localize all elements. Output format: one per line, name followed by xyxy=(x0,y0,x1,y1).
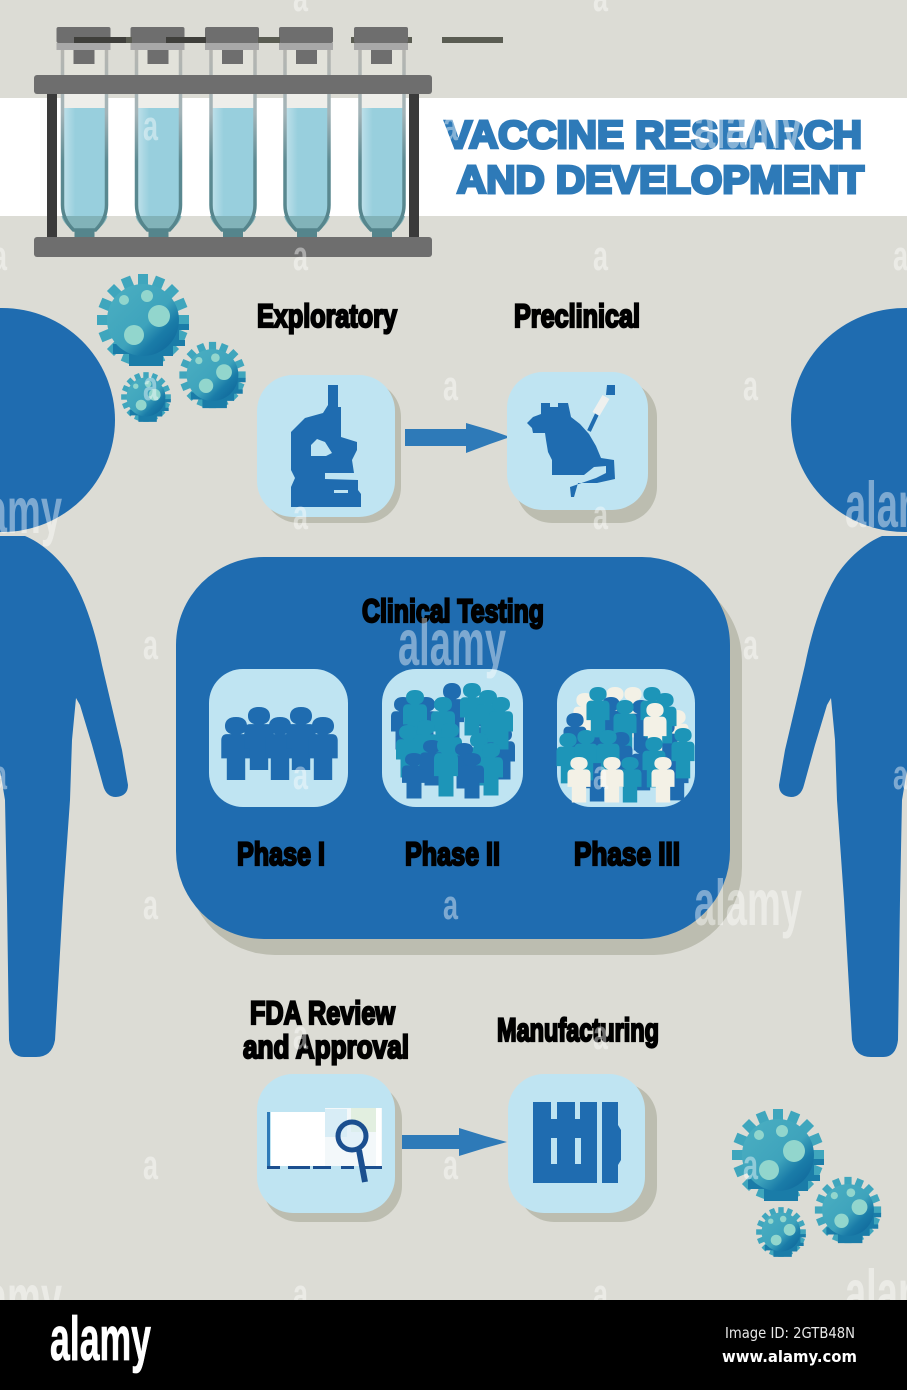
arrow: FDA review to manufacturing xyxy=(402,1128,507,1156)
title: VACCINE RESEARCH xyxy=(445,114,862,157)
person: right xyxy=(779,308,907,1057)
label: Clinical Testing: Clinical Testing xyxy=(362,593,544,629)
watermarks: a xyxy=(593,1270,608,1317)
title: AND DEVELOPMENT xyxy=(457,159,864,202)
card: microscope xyxy=(257,375,401,523)
icon: mouse with syringe xyxy=(527,385,615,497)
footer bar xyxy=(0,1300,907,1390)
card: Phase II xyxy=(382,669,523,807)
watermarks: a xyxy=(743,1141,758,1188)
watermarks: a xyxy=(443,881,458,928)
watermarks: a xyxy=(293,232,308,279)
watermarks: a xyxy=(143,362,158,409)
watermarks: alamy xyxy=(398,606,506,679)
watermarks: a xyxy=(743,362,758,409)
label: Exploratory: Exploratory xyxy=(257,298,397,334)
label: FDA Review and Approval: FDA Review xyxy=(250,995,395,1031)
label: Manufacturing: Manufacturing xyxy=(497,1012,659,1048)
card: Phase I xyxy=(209,669,348,807)
watermarks: a xyxy=(743,621,758,668)
label: Phase III: Phase III xyxy=(574,836,680,872)
header band xyxy=(0,98,907,216)
watermarks: a xyxy=(293,491,308,538)
panel: clinical testing xyxy=(176,557,742,955)
watermarks: a xyxy=(443,362,458,409)
watermarks: alamy xyxy=(694,89,802,162)
footer logo: alamy xyxy=(50,1305,151,1374)
watermarks: a xyxy=(593,232,608,279)
watermarks: a xyxy=(293,1270,308,1317)
card: mouse xyxy=(507,372,657,523)
icon: microscope xyxy=(291,385,361,507)
label: Phase II: Phase II xyxy=(405,836,500,872)
virus cluster: top left xyxy=(97,274,246,422)
footer url: www.alamy.com xyxy=(722,1347,857,1366)
label: Preclinical: Preclinical xyxy=(514,298,640,334)
watermarks: a xyxy=(593,1011,608,1058)
arrow: exploratory to preclinical xyxy=(405,423,510,453)
stray dash xyxy=(442,37,503,43)
watermarks: alamy xyxy=(694,866,802,939)
watermarks: a xyxy=(143,1141,158,1188)
watermarks: a xyxy=(293,1011,308,1058)
card: Phase III xyxy=(556,669,695,807)
card: FDA review xyxy=(257,1074,402,1222)
virus cluster: bottom right xyxy=(732,1109,881,1257)
test tube rack xyxy=(34,27,432,257)
label: Phase I: Phase I xyxy=(237,836,325,872)
watermarks: a xyxy=(143,881,158,928)
footer image id: Image ID: 2GTB48N xyxy=(725,1324,855,1342)
watermarks: a xyxy=(143,621,158,668)
card: manufacturing xyxy=(508,1074,657,1222)
watermarks: a xyxy=(593,491,608,538)
watermarks: a xyxy=(443,102,458,149)
title xyxy=(445,114,864,202)
person: left xyxy=(0,308,128,1057)
watermarks: a xyxy=(293,751,308,798)
icon: book and magnifier xyxy=(267,1108,382,1182)
icon: vials xyxy=(533,1102,621,1183)
watermarks: a xyxy=(443,1141,458,1188)
watermarks: a xyxy=(143,102,158,149)
label: FDA Review and Approval xyxy=(243,995,409,1065)
watermarks: a xyxy=(593,751,608,798)
label: FDA Review and Approval: and Approval xyxy=(243,1029,409,1065)
